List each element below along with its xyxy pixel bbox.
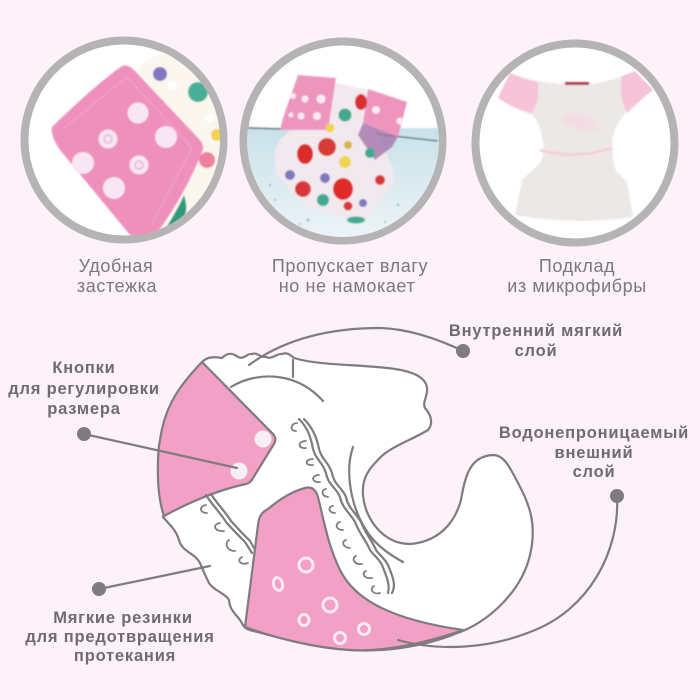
caption: lining: из микрофибры <box>507 276 647 296</box>
caption: fastener: Удобная <box>79 256 153 276</box>
pink waistband flap <box>158 362 275 516</box>
panel: microfiber lining photo <box>476 44 674 242</box>
caption: waterproof: Пропускает влагу <box>272 256 428 276</box>
callout line: snaps <box>77 427 237 468</box>
label: snaps: размера <box>47 400 121 418</box>
label: snaps: Кнопки <box>52 359 116 377</box>
printed diaper body <box>275 83 393 223</box>
label: inner soft layer: Внутренний мягкий <box>449 322 623 340</box>
diagram: diaper illustration <box>158 353 533 650</box>
label: elastics: протекания <box>74 647 176 665</box>
label: waterproof layer: слой <box>573 463 615 481</box>
panel: waterproof photo <box>240 42 450 243</box>
pink tabs <box>280 75 336 130</box>
label: elastics: для предотвращения <box>25 628 215 646</box>
white body <box>163 353 533 650</box>
panel: convenient fastener photo <box>24 40 230 240</box>
printed fabric behind flap <box>138 52 220 230</box>
elastic stitches <box>201 423 380 593</box>
print motifs <box>297 144 313 164</box>
callout line: inner soft layer <box>249 328 470 365</box>
water droplets <box>269 184 399 225</box>
pink outer layer <box>245 487 463 650</box>
label: elastics: Мягкие резинки <box>53 609 193 627</box>
label: waterproof layer: Водонепроницаемый <box>499 424 689 442</box>
callout line: elastics <box>92 566 210 596</box>
label: inner soft layer: слой <box>515 342 557 360</box>
elastic waves <box>299 419 389 593</box>
inner lines <box>231 376 323 401</box>
caption: waterproof: но не намокает <box>279 276 415 296</box>
caption: lining: Подклад <box>539 256 615 276</box>
pink flap with snaps <box>52 66 203 235</box>
caption: fastener: застежка <box>77 276 158 296</box>
label: waterproof layer: внешний <box>555 444 633 462</box>
callout line: waterproof layer <box>398 489 624 647</box>
snap rings on outer layer <box>272 558 370 644</box>
snaps on flap <box>254 430 272 448</box>
label: snaps: для регулировки <box>8 380 160 398</box>
